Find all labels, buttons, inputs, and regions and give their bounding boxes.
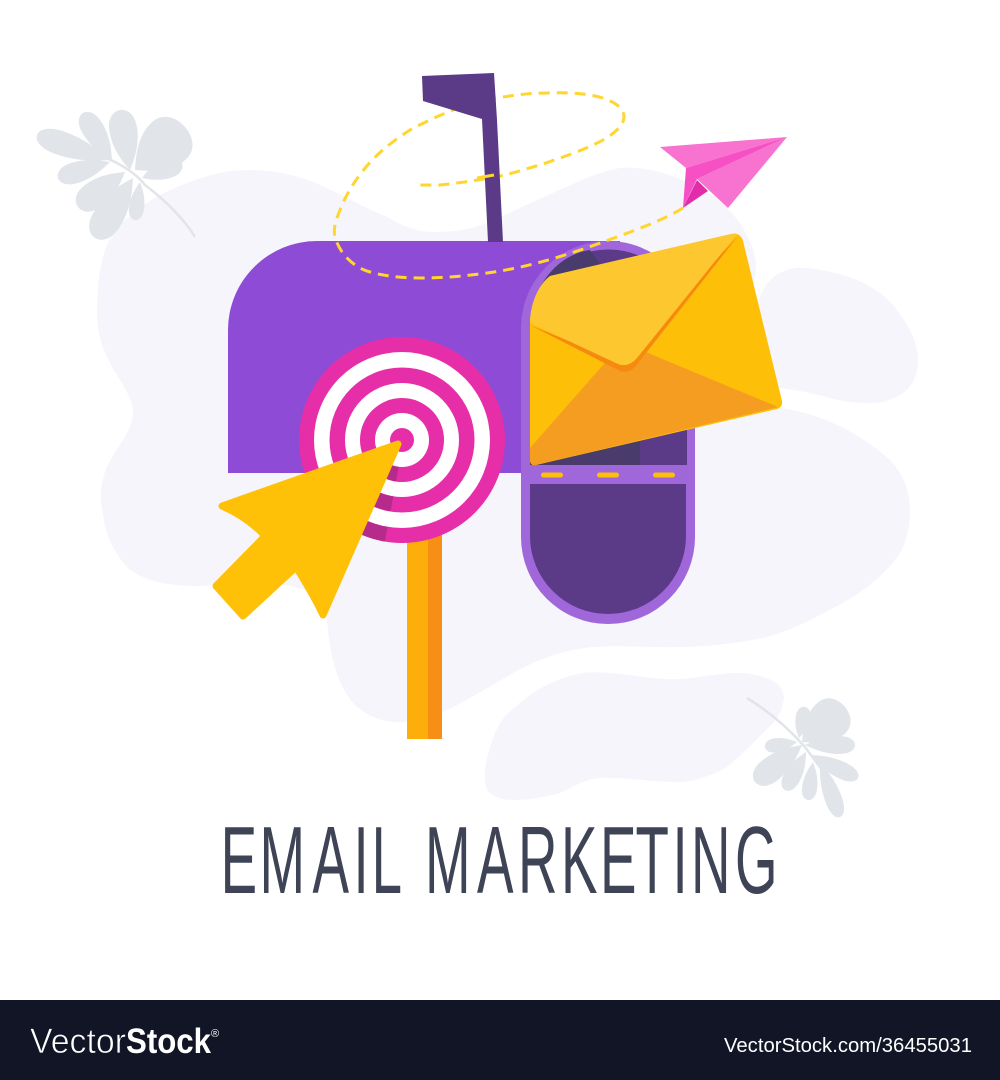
footer logo xyxy=(30,1022,219,1061)
title: EMAIL MARKETING xyxy=(221,806,778,914)
cursor arrow xyxy=(216,444,398,616)
background blob: main xyxy=(97,168,918,722)
envelope xyxy=(530,234,782,465)
mailbox flag xyxy=(422,73,503,242)
background blob: lower xyxy=(485,672,784,800)
paper plane xyxy=(660,137,787,208)
decorative leaf: top left xyxy=(33,107,201,246)
footer logo: Stock xyxy=(126,1022,211,1061)
target xyxy=(299,337,505,543)
footer url: VectorStock.com/36455031 xyxy=(724,1035,972,1057)
footer logo: ® xyxy=(211,1028,219,1040)
dashed flight path xyxy=(334,93,683,278)
mailbox body xyxy=(228,241,620,473)
target post xyxy=(407,530,442,739)
mailbox door xyxy=(521,241,695,624)
footer bar xyxy=(0,1000,1000,1080)
footer logo: Vector xyxy=(30,1022,126,1061)
decorative leaf: bottom right xyxy=(747,691,862,820)
